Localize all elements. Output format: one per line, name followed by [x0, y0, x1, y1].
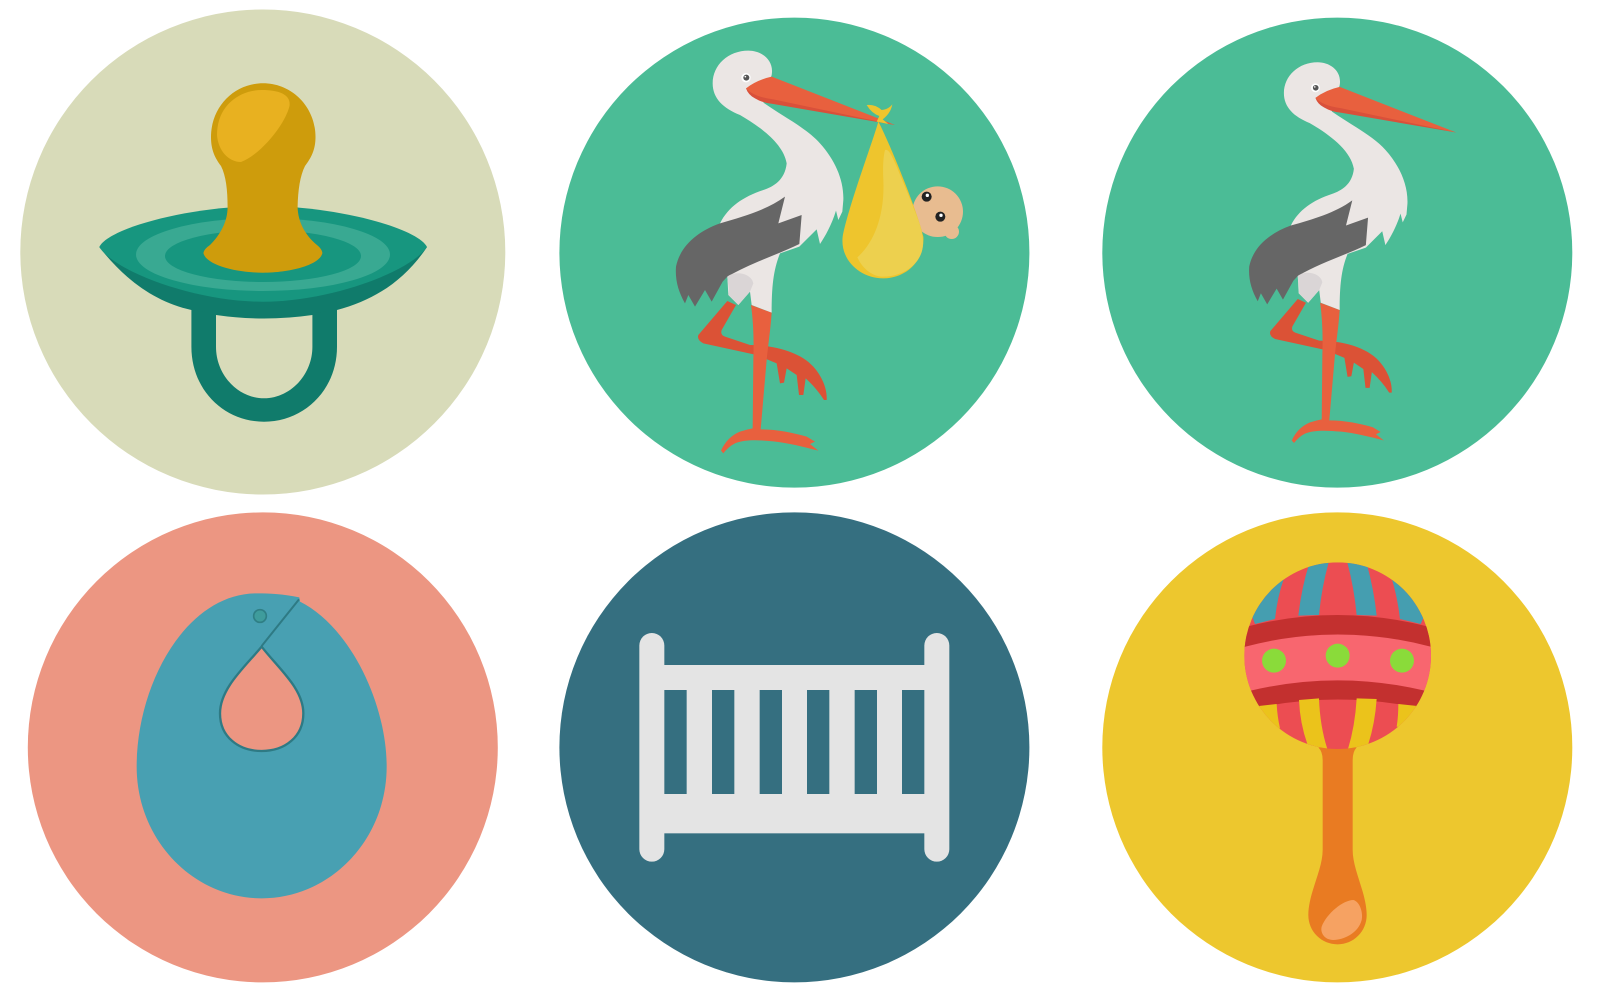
circle background: bib	[28, 512, 498, 982]
panel: stork	[1102, 18, 1572, 488]
icon: rattle	[1240, 560, 1437, 944]
icon: pacifier	[99, 83, 427, 422]
baby head	[912, 186, 963, 239]
icon: stork carrying baby bundle	[676, 51, 963, 453]
panel: pacifier	[20, 10, 505, 494]
circle background: pacifier	[20, 10, 505, 494]
icon: crib	[639, 633, 949, 862]
circle background: rattle	[1102, 512, 1572, 982]
circle background: stork with baby	[559, 18, 1029, 488]
icon: stork	[1249, 62, 1456, 443]
panel: crib	[559, 512, 1029, 982]
icon: bib	[137, 593, 387, 898]
panel: bib	[28, 512, 498, 982]
panel: rattle	[1102, 512, 1572, 982]
circle background: stork	[1102, 18, 1572, 488]
baby bundle	[842, 104, 923, 278]
panel: stork carrying baby	[559, 18, 1029, 488]
circle background: crib	[559, 512, 1029, 982]
